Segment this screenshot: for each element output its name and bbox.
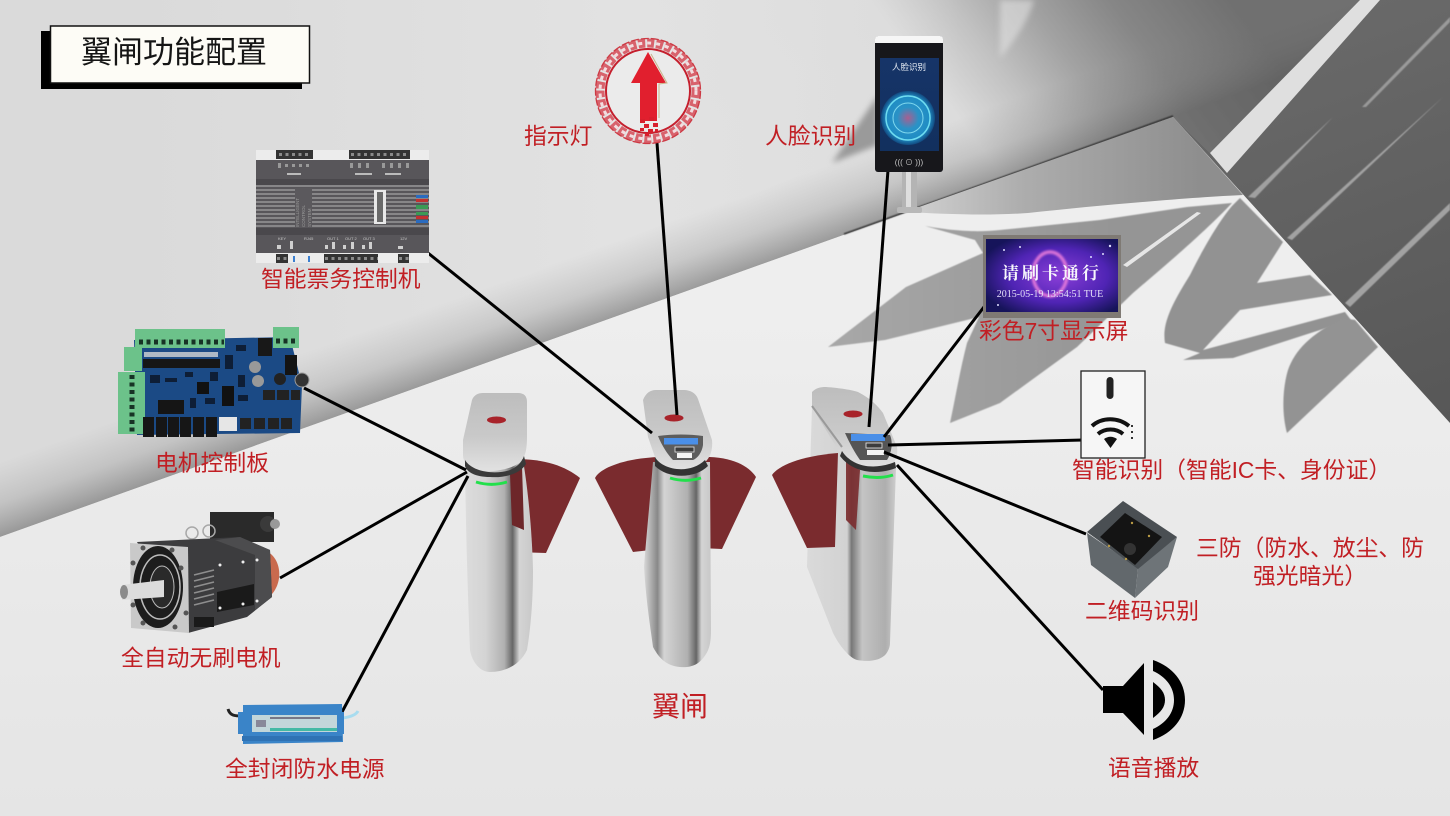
label: face recognition: 人脸识别: [765, 123, 856, 149]
icon: ticket control unit: 12V: [400, 236, 407, 241]
background: room wall and floor with leaf shadows: [0, 0, 1450, 537]
icon: ticket control unit: INTELLIGENT: [295, 198, 300, 227]
right turnstile gate: [772, 387, 897, 661]
icon: smart card reader: [1081, 371, 1145, 458]
label: indicator light: 指示灯: [524, 123, 592, 149]
icon: waterproof power supply: [228, 704, 358, 744]
icon: 7-inch colour display: [983, 235, 1121, 318]
label: motor control board: 电机控制板: [155, 450, 269, 476]
label: ticket control unit: 智能票务控制机: [261, 266, 421, 292]
icon: motor control board: [118, 327, 309, 437]
label: QR recognition: 二维码识别: [1085, 598, 1199, 624]
icon: face recognition terminal: 人脸识别: [892, 62, 926, 72]
icon: ticket control unit: RJ45: [304, 236, 314, 241]
connector lines: [280, 143, 1103, 712]
icon: 7-inch colour display: 2015-05-19 13:54:51 TUE: [997, 289, 1103, 300]
icon: indicator light with red arrow: [596, 38, 700, 144]
icon: 7-inch colour display: 请刷卡通行: [1002, 263, 1102, 283]
icon: face recognition terminal: [875, 36, 943, 213]
icon: speaker: [1103, 660, 1185, 740]
icon: ticket control unit: SYSTEM: [307, 208, 312, 227]
icon: ticket control unit: OUT 3: [363, 236, 375, 241]
icon: ticket control unit: [256, 150, 429, 263]
label: three-proof note: [1196, 535, 1424, 589]
icon: ticket control unit: CONTROL: [301, 205, 306, 227]
icon: brushless motor: [120, 512, 280, 633]
icon: ticket control unit: KEY: [278, 236, 286, 241]
icon: ticket control unit: OUT 1: [327, 236, 339, 241]
label: three-proof note: 强光暗光）: [1253, 563, 1367, 589]
centre turnstile gate: [595, 390, 756, 667]
icon: ticket control unit: OUT 2: [345, 236, 357, 241]
label: waterproof power supply: 全封闭防水电源: [225, 756, 385, 782]
label: three-proof note: 三防（防水、放尘、防: [1196, 535, 1424, 561]
label: voice playback: 语音播放: [1108, 755, 1199, 781]
icon: face recognition terminal: ((( ⊙ ))): [895, 158, 924, 167]
label: gate: 翼闸: [652, 691, 708, 722]
icon: QR code scanner: [1087, 501, 1177, 598]
label: smart identification: 智能识别（智能IC卡、身份证）: [1072, 457, 1391, 483]
title: 翼闸功能配置: [81, 35, 267, 70]
label: 7-inch colour display: 彩色7寸显示屏: [979, 318, 1128, 344]
left turnstile gate: [463, 393, 580, 672]
label: brushless motor: 全自动无刷电机: [121, 645, 281, 671]
title: [41, 26, 310, 89]
